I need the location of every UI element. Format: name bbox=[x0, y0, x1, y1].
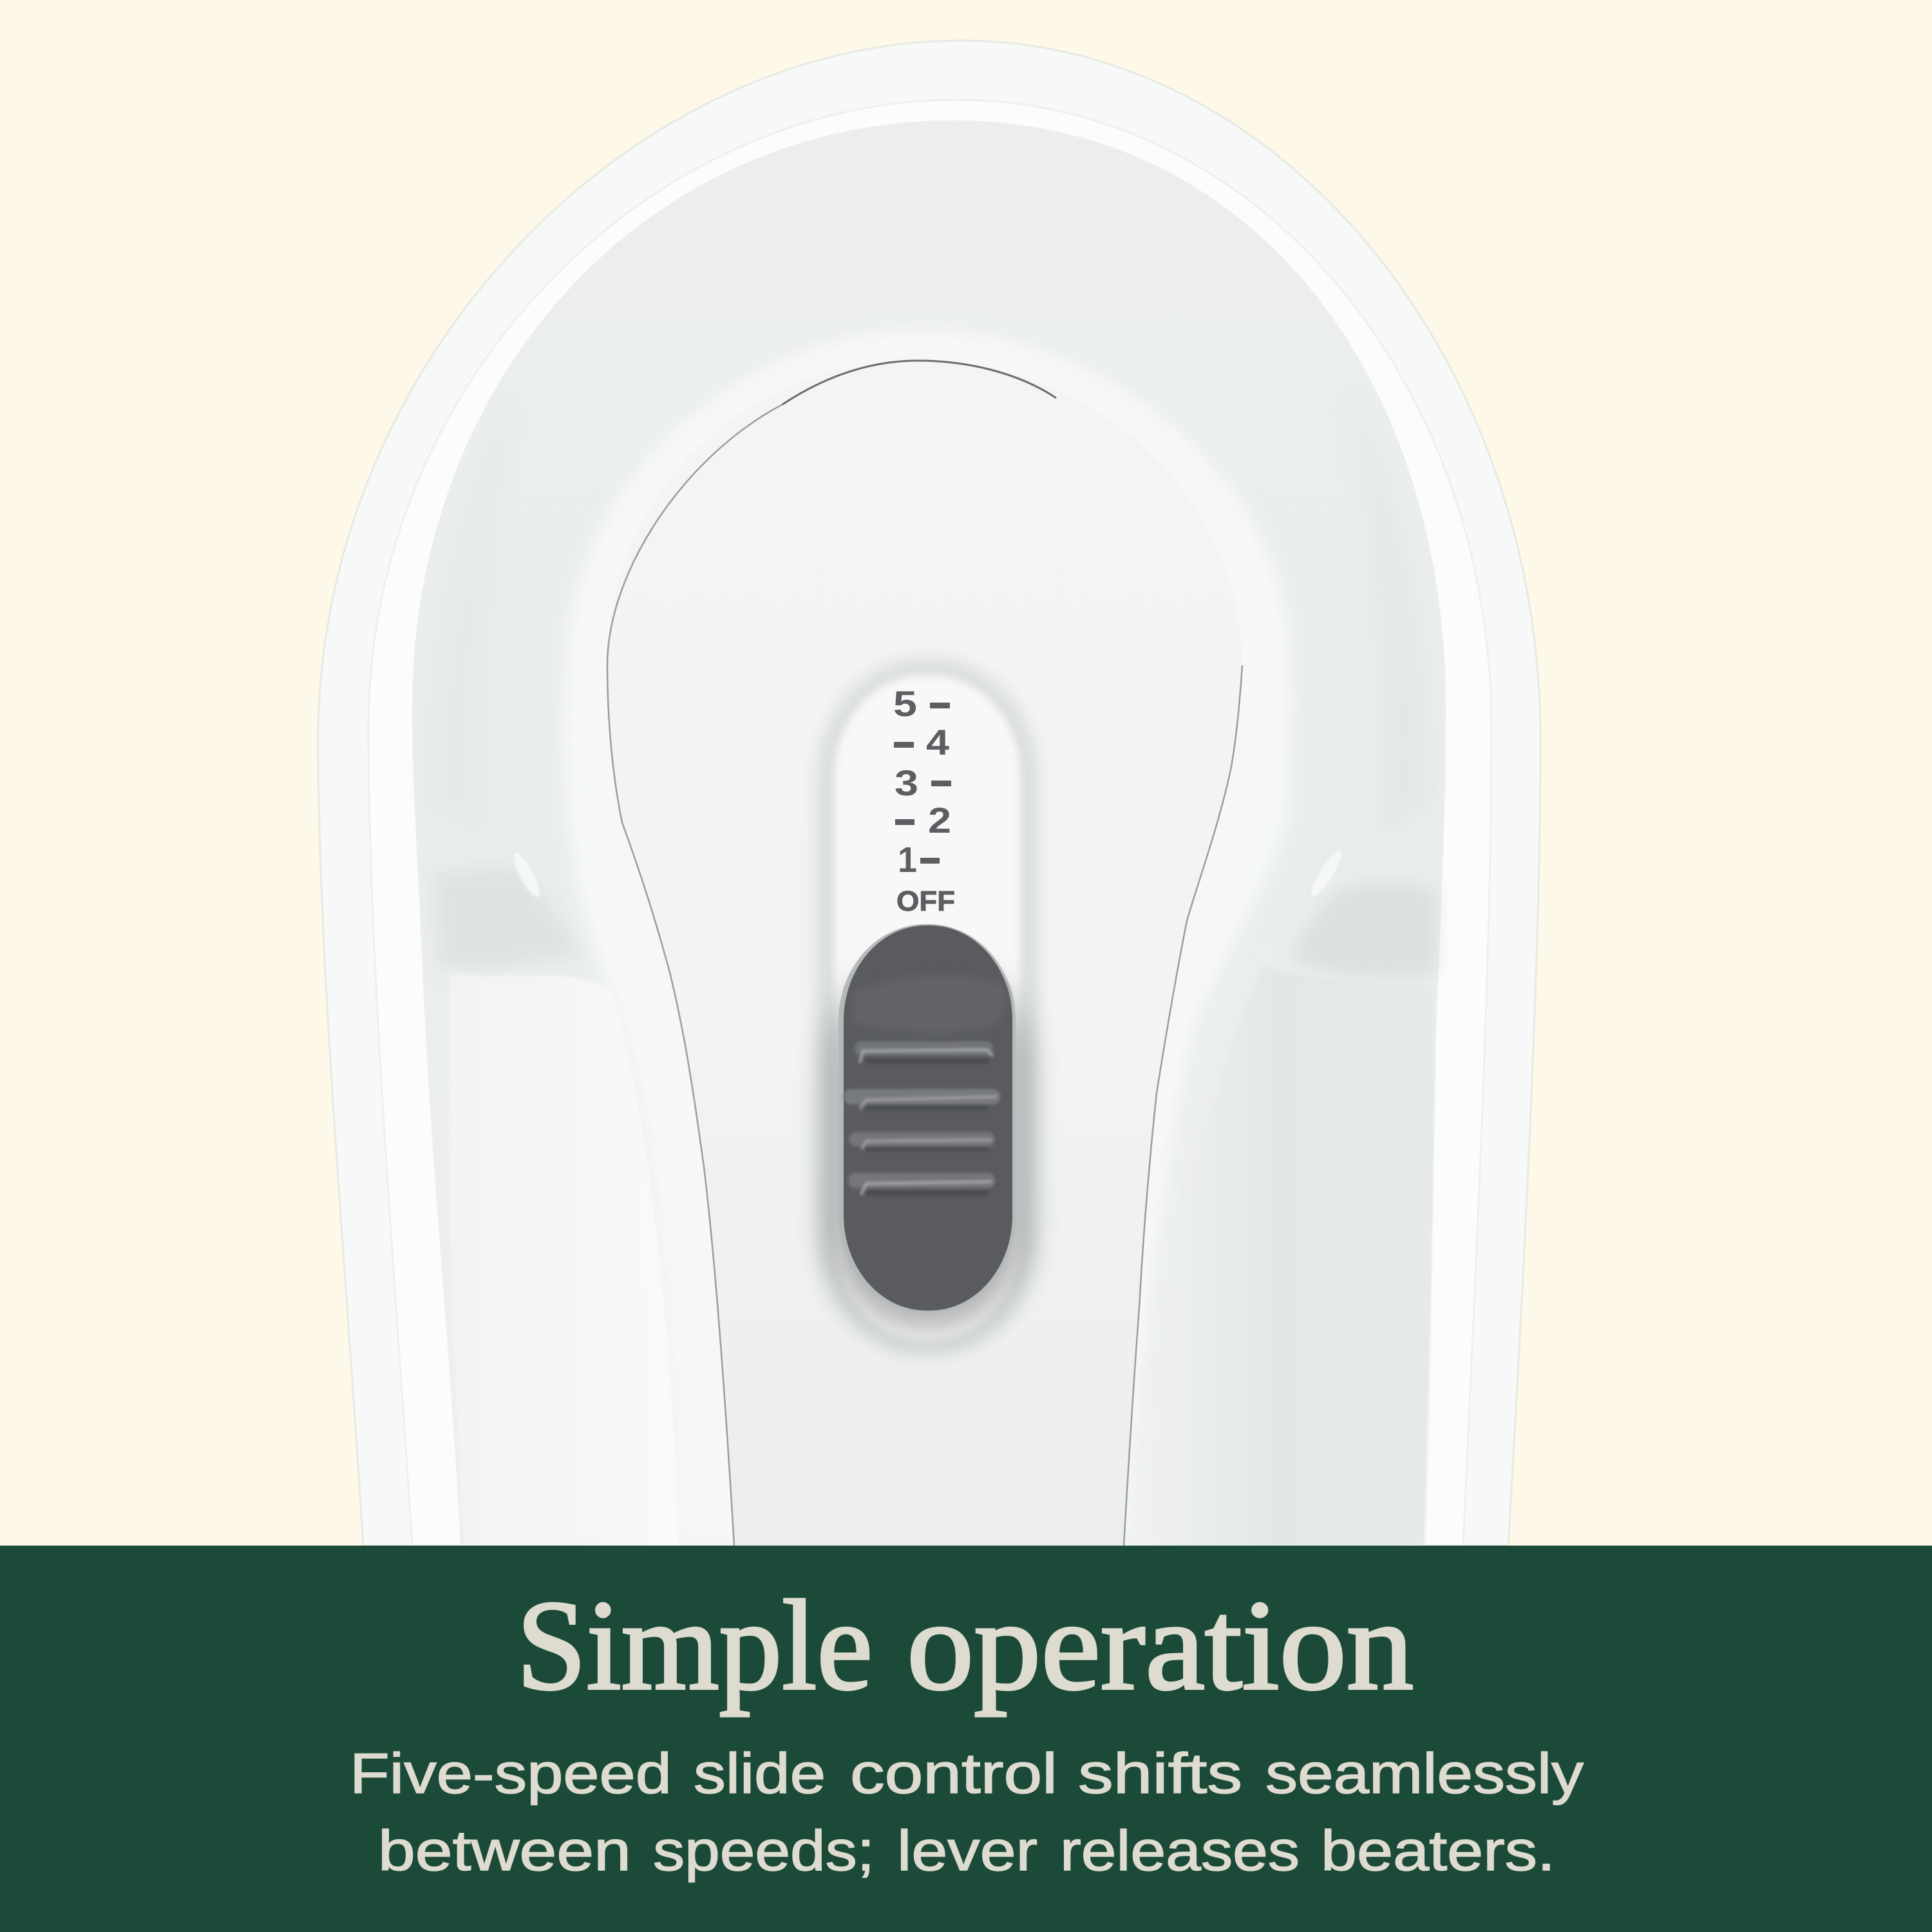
center plate bbox=[607, 361, 1242, 1546]
knob ridge 1 bbox=[855, 1041, 993, 1064]
description line 2: beaters. bbox=[1321, 1819, 1555, 1882]
recessed dish bbox=[412, 120, 1446, 1546]
plate seam: left bbox=[607, 404, 782, 1546]
background bbox=[0, 0, 1932, 1546]
description line 1: Five-speed bbox=[350, 1741, 672, 1805]
speed scale bbox=[893, 683, 955, 917]
description line 2 bbox=[378, 1819, 1555, 1882]
plate seam: top bbox=[782, 361, 1056, 404]
dish shading: right wall bbox=[1352, 399, 1433, 837]
lower left panel bbox=[496, 976, 677, 1544]
knob ridge 4 bbox=[848, 1173, 995, 1196]
right shoulder glint bbox=[1305, 845, 1348, 902]
product: hand mixer body bbox=[318, 41, 1540, 1546]
inner rim highlight bbox=[368, 100, 1492, 1546]
dish shading: left wall bbox=[425, 399, 509, 837]
speed 3: 3 bbox=[895, 762, 918, 803]
knob sheen bbox=[853, 975, 1007, 1033]
description line 2: speeds; bbox=[653, 1819, 875, 1882]
tick 4 bbox=[894, 742, 914, 748]
slider knob bbox=[838, 924, 1016, 1312]
description line 1: slide bbox=[694, 1741, 826, 1805]
slider knob face bbox=[844, 925, 1012, 1311]
knob ridge 3 bbox=[849, 1132, 995, 1151]
off label: OFF bbox=[896, 886, 955, 917]
slider slot bbox=[836, 676, 1019, 1340]
description line 1: control bbox=[850, 1741, 1057, 1805]
tick 1 bbox=[920, 858, 940, 864]
speed 5: 5 bbox=[893, 683, 917, 724]
caption band bbox=[0, 1546, 1932, 1932]
outer shell bbox=[318, 41, 1540, 1546]
central ridge around plate bbox=[563, 328, 1291, 1546]
description line 2: between bbox=[378, 1819, 631, 1882]
heading bbox=[516, 1575, 1414, 1717]
tick 3 bbox=[931, 781, 951, 786]
right shoulder shadow bbox=[1291, 884, 1436, 978]
plate seam: right bbox=[1124, 665, 1242, 1546]
knob ridge 2 bbox=[844, 1089, 1000, 1110]
tick 5 bbox=[930, 703, 950, 708]
left shoulder shadow bbox=[435, 867, 583, 969]
tick 2 bbox=[895, 819, 914, 825]
heading: Simple bbox=[516, 1575, 873, 1717]
knob shadow bbox=[828, 960, 1027, 1330]
left shoulder glint bbox=[508, 848, 545, 901]
description line 1 bbox=[350, 1741, 1584, 1805]
description text bbox=[350, 1741, 1584, 1882]
description line 2: lever bbox=[897, 1819, 1037, 1882]
speed 4: 4 bbox=[926, 722, 949, 762]
description line 1: shifts bbox=[1078, 1741, 1242, 1805]
speed 1: 1 bbox=[898, 839, 917, 880]
speed 2: 2 bbox=[928, 800, 951, 840]
description line 1: seamlessly bbox=[1265, 1741, 1584, 1805]
description line 2: releases bbox=[1060, 1819, 1300, 1882]
slider slot halo bbox=[828, 670, 1027, 1346]
heading: operation bbox=[907, 1575, 1414, 1717]
lower right panel bbox=[1257, 1191, 1432, 1544]
